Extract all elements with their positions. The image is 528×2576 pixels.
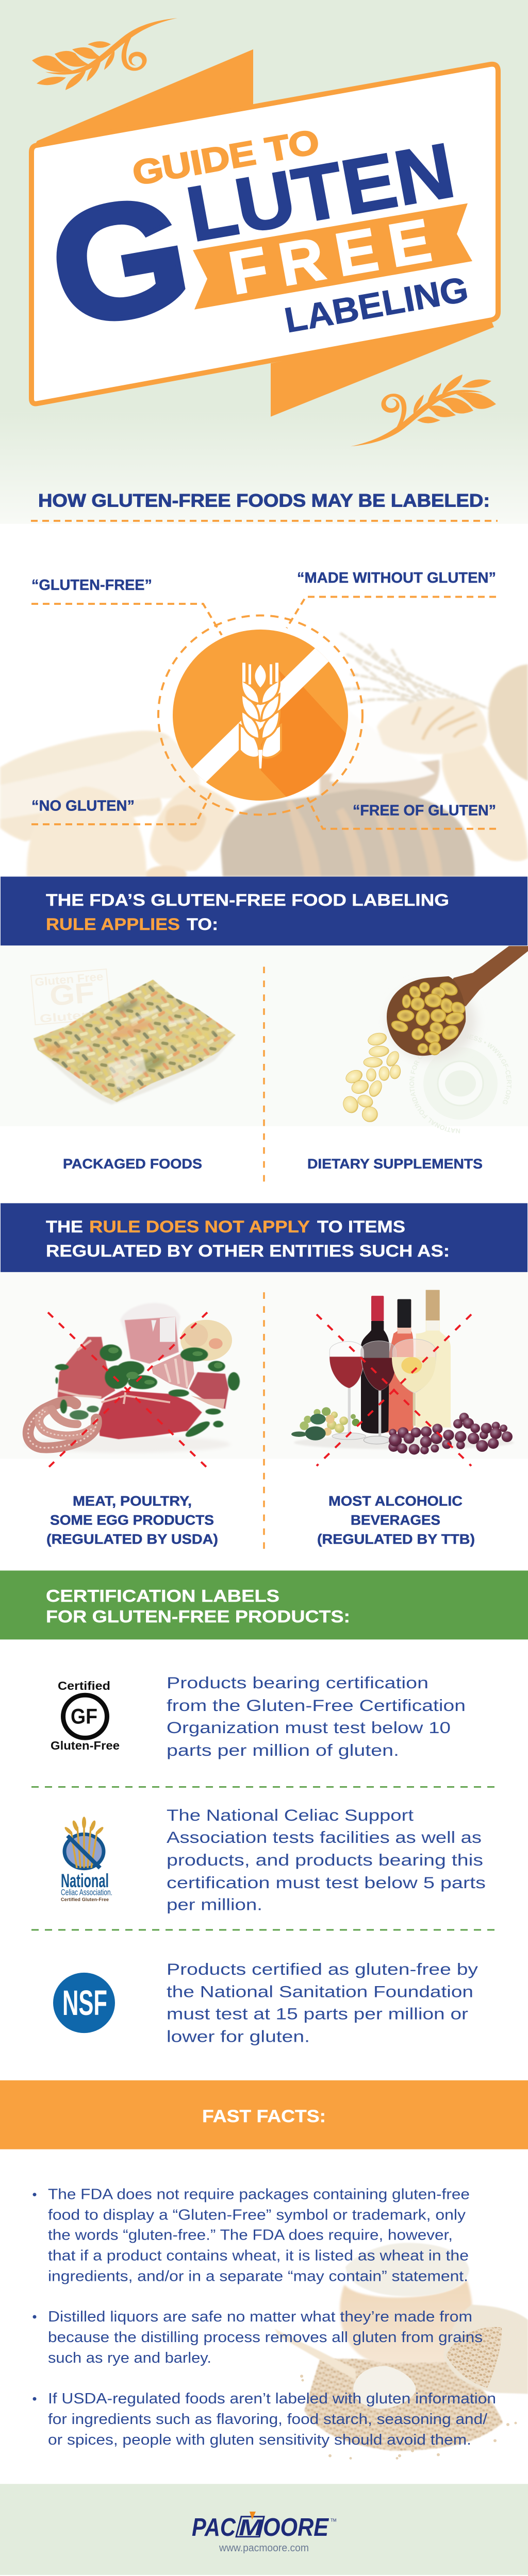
bullet 1: that if a product contains wheat, it is listed as wheat in the — [48, 2248, 469, 2264]
wheat stalks — [340, 633, 488, 708]
bullet 1: ingredients, and/or in a separate “may contain” statement. — [48, 2268, 468, 2285]
label: free of gluten: “FREE OF GLUTEN” — [353, 803, 496, 819]
header background — [0, 0, 528, 524]
banner: certification labels: FOR GLUTEN-FREE PRODUCTS: — [46, 1607, 350, 1626]
rose bottle — [386, 1300, 414, 1432]
capsules in spoon — [390, 979, 467, 1056]
label: alcoholic beverages: MOST ALCOHOLIC — [328, 1494, 463, 1509]
flour bowl — [320, 760, 439, 801]
logo: national celiac association: National — [61, 1870, 109, 1891]
bullet 2 — [33, 2309, 483, 2366]
banner: rule does not apply: TO ITEMS — [317, 1217, 405, 1236]
text: nsf: lower for gluten. — [167, 2027, 310, 2046]
bullet 1: food to display a “Gluten-Free” symbol or trademark, only — [48, 2207, 466, 2223]
scattered grains — [300, 2375, 517, 2460]
small bun — [145, 866, 187, 884]
left loaf — [0, 731, 200, 819]
logo: pacmoore: PAC — [192, 2513, 236, 2541]
green grapes — [300, 1407, 359, 1436]
glasses — [329, 1339, 436, 1444]
logo: national celiac association: Celiac Association. — [61, 1888, 112, 1897]
rye bread slices — [221, 789, 474, 877]
text: nsf: the National Sanitation Foundation — [167, 1982, 473, 2001]
far right loaf — [488, 664, 528, 781]
gluten free stamp: Gluten Free — [34, 970, 104, 989]
logo: pacmoore — [192, 2512, 337, 2541]
banner: rule does not apply: REGULATED BY OTHER ENTITIES SUCH AS: — [46, 1241, 450, 1260]
icon: red cross over wine — [317, 1314, 471, 1466]
website: www.pacmoore.com — [219, 2542, 309, 2554]
logo: certified gf: Gluten-Free — [51, 1739, 120, 1753]
text: national celiac: products, and products bearing this — [167, 1851, 483, 1869]
banner: rule does not apply: THE — [46, 1217, 83, 1236]
label: gluten-free: “GLUTEN-FREE” — [31, 577, 152, 594]
logo: certified gf: Certified — [58, 1680, 110, 1693]
logo: certified gf: GF — [71, 1705, 97, 1728]
logo: pacmoore: OORE — [263, 2513, 329, 2541]
logo: national celiac association: Certified Gluten-Free — [61, 1897, 109, 1902]
title banner — [31, 49, 498, 417]
grain heap — [304, 2359, 503, 2451]
label: packaged foods: PACKAGED FOODS — [63, 1156, 202, 1172]
title: luten: LUTEN — [180, 127, 461, 258]
bullet 3: for ingredients such as flavoring, food starch, seasoning and/ — [48, 2411, 487, 2428]
title: guide to: GUIDE TO — [129, 123, 322, 193]
image band: packaged foods and supplements — [0, 945, 528, 1126]
background photo: flour and buckwheat — [275, 2243, 528, 2460]
banner: rule applies: THE FDA’S GLUTEN-FREE FOOD LABELING — [46, 891, 449, 909]
fast facts list — [33, 2187, 496, 2448]
text: national celiac: per million. — [167, 1895, 262, 1914]
gluten free stamp: GF — [48, 976, 96, 1012]
loose capsules — [341, 1031, 402, 1122]
text: nsf — [167, 1960, 478, 2046]
logo: national celiac association — [61, 1817, 112, 1902]
banner: rule does not apply — [1, 1203, 527, 1272]
label: made without gluten — [287, 570, 496, 628]
text: gf certification — [167, 1673, 466, 1759]
text: gf certification: from the Gluten-Free Certification — [167, 1696, 466, 1715]
bullet 2: because the distilling process removes all gluten from grains — [48, 2329, 483, 2346]
label: free of gluten — [307, 798, 496, 829]
logo: certified gf — [51, 1680, 120, 1753]
wheat symbol — [241, 663, 280, 769]
text: gf certification: parts per million of gluten. — [167, 1741, 399, 1759]
bottom left roll — [27, 787, 146, 877]
gluten free stamp — [31, 969, 111, 1026]
top right roll — [377, 698, 487, 754]
banner: rule applies: TO: — [187, 914, 218, 934]
flour heap — [330, 711, 435, 783]
bullet 1: the words “gluten-free.” The FDA does require, however, — [48, 2227, 453, 2243]
banner: rule applies: RULE APPLIES — [46, 914, 180, 934]
footer — [0, 2484, 528, 2575]
label: meat poultry: (REGULATED BY USDA) — [46, 1532, 218, 1547]
label: no gluten: “NO GLUTEN” — [31, 798, 135, 814]
text: national celiac: certification must test below 5 parts — [167, 1873, 486, 1892]
banner: fast facts — [0, 2080, 528, 2149]
icon: wheat sprig top left — [32, 18, 177, 90]
bullet 3: or spices, people with gluten sensitivity should avoid them. — [48, 2432, 471, 2448]
background photo: bread and flour — [0, 633, 528, 884]
title: labeling: LABELING — [282, 269, 471, 340]
image band: not regulated items — [0, 1272, 528, 1459]
banner: rule applies — [1, 877, 527, 945]
burlap sack — [443, 2305, 528, 2394]
label: made without gluten: “MADE WITHOUT GLUTEN” — [297, 570, 496, 586]
banner: fast facts: FAST FACTS: — [202, 2107, 326, 2126]
bullet 1: The FDA does not require packages containing gluten-free — [48, 2187, 470, 2202]
label: dietary supplements: DIETARY SUPPLEMENTS — [307, 1156, 483, 1172]
wooden spoon — [275, 2329, 356, 2380]
bullet 3 — [33, 2391, 496, 2448]
right baguette — [442, 739, 528, 861]
middle roll — [150, 784, 236, 871]
red grapes — [388, 1413, 513, 1454]
title: big G: G — [37, 160, 203, 361]
logo: pacmoore: M — [239, 2514, 263, 2540]
bullet 3: If USDA-regulated foods aren’t labeled with gluten information — [48, 2391, 496, 2407]
image: spoon of supplements — [343, 946, 528, 1133]
label: gluten-free — [31, 577, 222, 635]
flour mound — [345, 2243, 469, 2296]
text: gf certification: Organization must test below 10 — [167, 1718, 451, 1737]
divider: applies columns — [263, 967, 265, 1182]
divider: not-apply columns — [263, 1292, 265, 1550]
label: alcoholic beverages — [317, 1494, 475, 1547]
image: meat and poultry — [24, 1303, 240, 1453]
white bottle — [416, 1290, 451, 1428]
heading: how foods may be labeled: HOW GLUTEN-FREE FOODS MAY BE LABELED: — [38, 490, 490, 511]
text: gf certification: Products bearing certification — [167, 1673, 428, 1692]
text: national celiac: Association tests facilities as well as — [167, 1828, 482, 1846]
icon: wheat sprig bottom right — [351, 375, 496, 446]
banner: certification labels — [0, 1570, 528, 1639]
label: meat poultry: SOME EGG PRODUCTS — [50, 1513, 214, 1528]
red bottle — [361, 1321, 389, 1433]
text: nsf: must test at 15 parts per million or — [167, 2005, 468, 2023]
icon: no wheat badge — [158, 616, 362, 815]
ribbon: free — [193, 204, 472, 310]
label: alcoholic beverages: BEVERAGES — [351, 1513, 440, 1528]
color patches — [43, 997, 216, 1081]
bullet 1 — [33, 2187, 470, 2285]
text: nsf: Products certified as gluten-free by — [167, 1960, 478, 1978]
label: meat poultry: MEAT, POULTRY, — [73, 1494, 192, 1509]
image: wine and grapes — [291, 1290, 514, 1454]
text: national celiac: The National Celiac Support — [167, 1806, 414, 1824]
text: national celiac — [167, 1806, 486, 1914]
banner panel — [31, 64, 498, 404]
banner fold flaps — [33, 49, 494, 417]
label: meat poultry — [46, 1494, 218, 1547]
icon: red cross over meat — [48, 1312, 207, 1468]
label: no gluten — [31, 792, 211, 824]
title: free: FREE — [224, 207, 436, 308]
logo: pacmoore: TM — [331, 2518, 337, 2522]
banner: certification labels: CERTIFICATION LABELS — [46, 1587, 279, 1606]
label: alcoholic beverages: (REGULATED BY TTB) — [317, 1532, 475, 1547]
logo: nsf — [53, 1973, 115, 2033]
gluten free stamp: Gluten — [39, 1008, 92, 1025]
image: packaged pasta — [31, 969, 236, 1105]
logo: nsf: NSF — [62, 1983, 107, 2023]
banner: rule does not apply: RULE DOES NOT APPLY — [89, 1217, 310, 1236]
wooden bowl — [340, 2280, 472, 2364]
parsley — [55, 1345, 240, 1439]
bullet 2: such as rye and barley. — [48, 2350, 211, 2366]
bullet 2: Distilled liquors are safe no matter what they’re made from — [48, 2309, 472, 2325]
certified stamp: NATIONAL FOUNDATION FOR CELIAC AWARENESS • WWW.GF-CERT.ORG — [409, 1035, 512, 1133]
